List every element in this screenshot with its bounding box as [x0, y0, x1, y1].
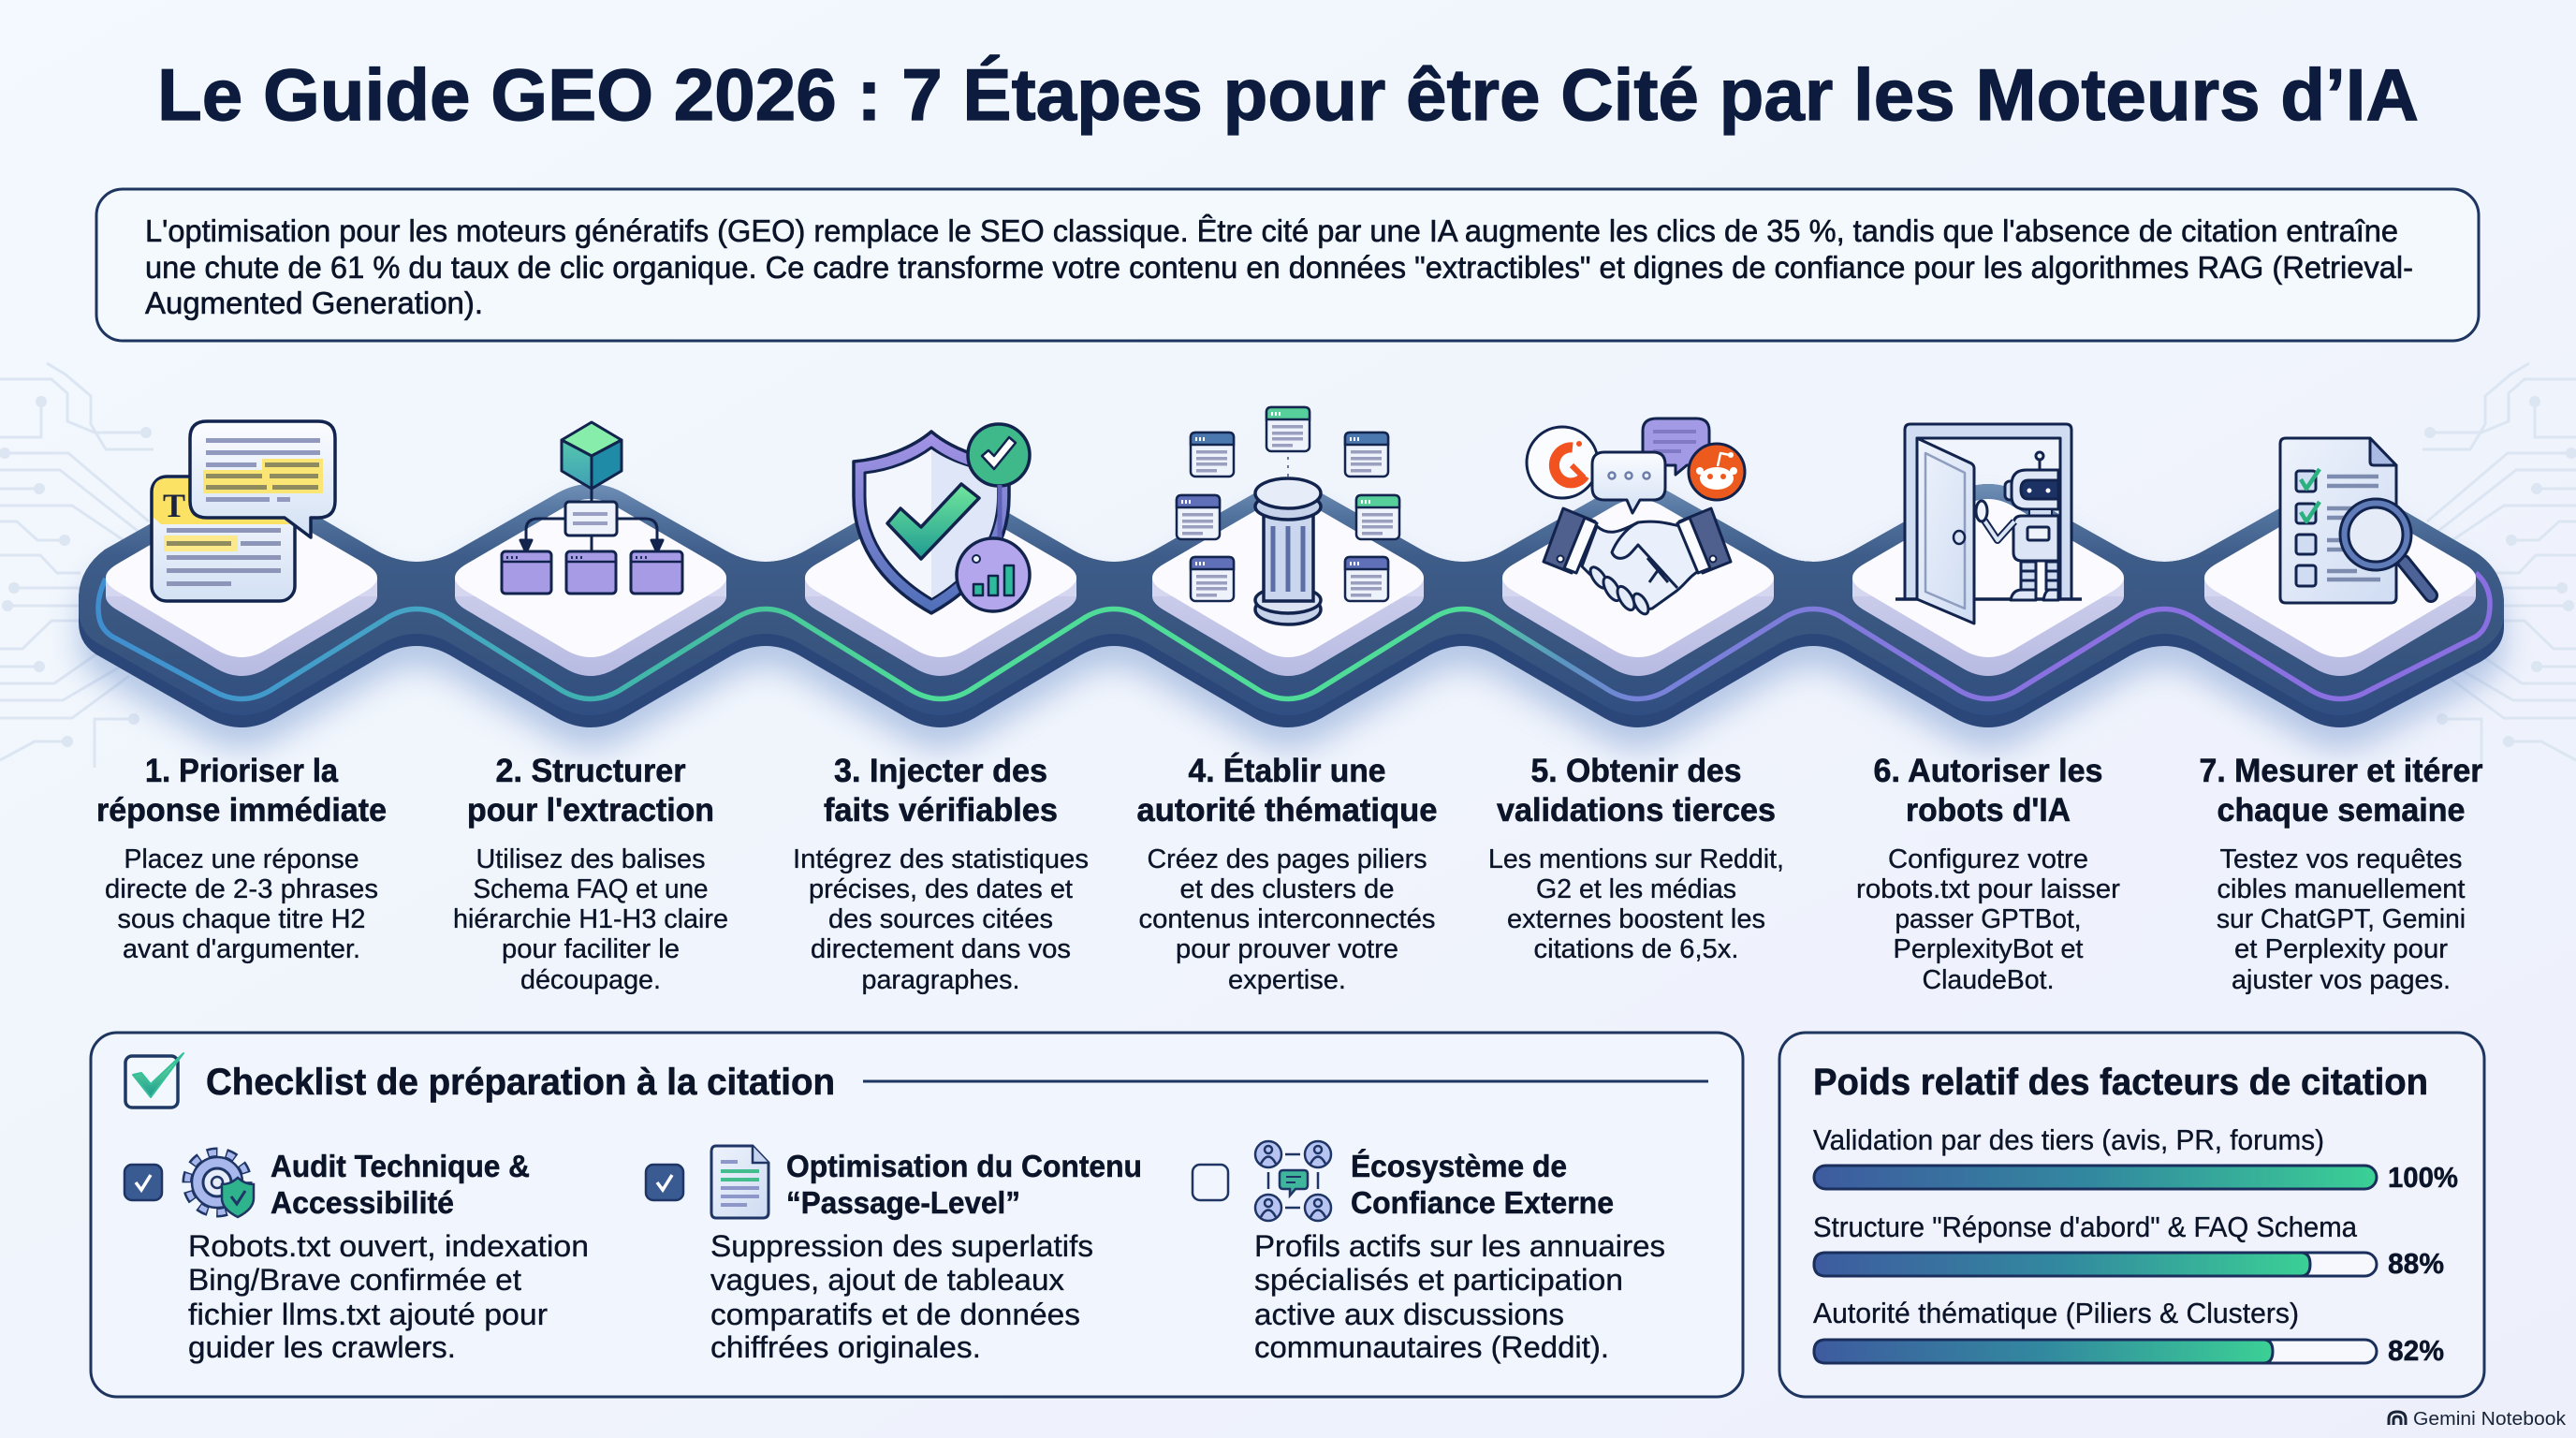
item: technical audit: fichier llms.txt ajouté pour — [188, 1298, 548, 1331]
step 4 text: Créez des pages piliers — [1148, 844, 1427, 874]
icon: pillar and cluster pages — [1177, 407, 1399, 624]
step 3 text: Intégrez des statistiques — [793, 844, 1089, 874]
step 4 text: autorité thématique — [1136, 792, 1438, 829]
step 6 text: robots.txt pour laisser — [1856, 874, 2120, 904]
bar: answer-first structure — [1813, 1211, 2444, 1280]
step 1 text: Placez une réponse — [124, 844, 359, 874]
step 1 text: directe de 2-3 phrases — [105, 874, 378, 904]
item: technical audit: Accessibilité — [271, 1185, 454, 1220]
step 3 text: des sources citées — [828, 904, 1053, 934]
logo: G2 — [1527, 427, 1598, 498]
step 5 text: citations de 6,5x. — [1533, 934, 1739, 964]
bar: third-party validation: Validation par des tiers (avis, PR, forums) — [1813, 1123, 2324, 1156]
item: content optimisation: comparatifs et de données — [710, 1298, 1080, 1331]
icon: checklist and magnifier — [2280, 438, 2431, 603]
step 3 text: directement dans vos — [811, 934, 1071, 964]
icon: hierarchy cube — [502, 422, 682, 594]
step 5 text — [1488, 753, 1784, 964]
step 6 text: ClaudeBot. — [1923, 965, 2054, 995]
step 4 text: 4. Établir une — [1189, 752, 1385, 789]
step 7 text: cibles manuellement — [2217, 874, 2466, 904]
step 3 text: 3. Injecter des — [834, 753, 1047, 789]
step 7 text: 7. Mesurer et itérer — [2200, 753, 2483, 789]
step 7 text: et Perplexity pour — [2234, 934, 2448, 964]
step 6 text: passer GPTBot, — [1895, 904, 2082, 934]
step 2 text: pour faciliter le — [502, 934, 680, 964]
step 2 text: pour l'extraction — [467, 792, 714, 829]
icon: verified shield — [854, 424, 1030, 613]
step 6 text — [1856, 753, 2120, 995]
step 1 text: avant d'argumenter. — [123, 934, 360, 964]
step 2 text: hiérarchie H1-H3 claire — [453, 904, 728, 934]
item: content optimisation: “Passage-Level” — [786, 1185, 1020, 1220]
step 2 text: Utilisez des balises — [476, 844, 706, 874]
step 6 text: 6. Autoriser les — [1874, 753, 2102, 789]
item: content optimisation: vagues, ajout de tableaux — [710, 1263, 1064, 1297]
item: technical audit — [124, 1149, 589, 1364]
step 5 text: G2 et les médias — [1536, 874, 1736, 904]
icon: document — [711, 1146, 768, 1218]
step 7 text: ajuster vos pages. — [2232, 965, 2451, 995]
bar: third-party validation — [1813, 1123, 2458, 1194]
step 5 text: Les mentions sur Reddit, — [1488, 844, 1784, 874]
process band — [79, 470, 2504, 750]
item: technical audit: Audit Technique & — [271, 1149, 530, 1183]
step 7 text: chaque semaine — [2217, 792, 2466, 829]
step 2 text: découpage. — [520, 965, 661, 995]
heading: factors: Poids relatif des facteurs de citation — [1813, 1062, 2428, 1103]
watermark: Gemini Notebook: Gemini Notebook — [2413, 1409, 2567, 1430]
step 7 text: Testez vos requêtes — [2220, 844, 2462, 874]
step 1 text: 1. Prioriser la — [145, 753, 338, 789]
bar: topical authority: Autorité thématique (Piliers & Clusters) — [1813, 1297, 2299, 1329]
item: technical audit: guider les crawlers. — [188, 1330, 456, 1364]
title: Le Guide GEO 2026 : 7 Étapes pour être Cité par les Moteurs d’IA — [157, 53, 2419, 136]
item: content optimisation: Suppression des superlatifs — [710, 1229, 1093, 1263]
item: trust ecosystem: Confiance Externe — [1351, 1185, 1614, 1220]
step 4 text: et des clusters de — [1179, 874, 1395, 904]
step 2 text: Schema FAQ et une — [474, 874, 708, 904]
item: trust ecosystem: communautaires (Reddit). — [1254, 1330, 1609, 1364]
panel: introduction: une chute de 61 % du taux de clic organique. Ce cadre transforme votre contenu en données "extractibles" et dignes de confiance pour les algorithmes RAG (Retrieval- — [145, 250, 2413, 285]
step 5 text: 5. Obtenir des — [1531, 753, 1741, 789]
item: trust ecosystem: Écosystème de — [1351, 1149, 1567, 1183]
item: trust ecosystem: active aux discussions — [1254, 1298, 1564, 1331]
panel: introduction: L'optimisation pour les moteurs génératifs (GEO) remplace le SEO classique. Être cité par une IA augmente les clics de 35 %, tandis que l'absence de citation entraîne — [145, 213, 2398, 248]
step 5 text: validations tierces — [1497, 792, 1776, 829]
step 1 text: réponse immédiate — [96, 792, 387, 829]
icon: answer documents: T — [163, 487, 185, 524]
step 2 text: 2. Structurer — [496, 753, 686, 789]
item: content optimisation — [646, 1146, 1142, 1364]
item: content optimisation: Optimisation du Contenu — [786, 1149, 1142, 1183]
icon: community network — [1255, 1141, 1331, 1221]
step 3 text: faits vérifiables — [824, 792, 1058, 829]
panel: introduction — [96, 189, 2479, 341]
step 3 text: précises, des dates et — [809, 874, 1073, 904]
panel: citation factors chart — [1779, 1033, 2484, 1397]
step 3 text — [793, 753, 1089, 995]
bar: answer-first structure: Structure "Réponse d'abord" & FAQ Schema — [1813, 1211, 2358, 1243]
item: technical audit: Bing/Brave confirmée et — [188, 1263, 521, 1297]
item: trust ecosystem — [1193, 1141, 1665, 1364]
icon: answer documents — [152, 421, 335, 601]
bar: topical authority: 82% — [2388, 1334, 2444, 1367]
step 6 text: PerplexityBot et — [1893, 934, 2084, 964]
step 7 text: sur ChatGPT, Gemini — [2217, 904, 2466, 934]
bar: third-party validation: 100% — [2388, 1161, 2458, 1194]
icon: handshake and review platforms — [1527, 418, 1745, 616]
icon: checklist header check — [125, 1053, 183, 1108]
bar: answer-first structure: 88% — [2388, 1247, 2444, 1280]
item: trust ecosystem: spécialisés et participation — [1254, 1263, 1623, 1297]
panel: introduction: Augmented Generation). — [145, 286, 483, 320]
item: technical audit: Robots.txt ouvert, indexation — [188, 1229, 589, 1263]
step 2 text — [453, 753, 728, 995]
step 3 text: paragraphes. — [861, 965, 1020, 995]
step 4 text: expertise. — [1228, 965, 1346, 995]
item: content optimisation: chiffrées originales. — [710, 1330, 981, 1364]
step 4 text: pour prouver votre — [1176, 934, 1398, 964]
step 7 text — [2200, 753, 2483, 995]
step 1 text: sous chaque titre H2 — [118, 904, 365, 934]
step 4 text — [1136, 752, 1438, 995]
step 6 text: Configurez votre — [1888, 844, 2088, 874]
logo: Reddit — [1689, 444, 1745, 500]
step 1 text — [96, 753, 387, 964]
icon: gear shield — [187, 1152, 254, 1217]
step 6 text: robots d'IA — [1906, 792, 2071, 829]
item: trust ecosystem: Profils actifs sur les annuaires — [1254, 1229, 1665, 1263]
step 5 text: externes boostent les — [1507, 904, 1765, 934]
step 4 text: contenus interconnectés — [1138, 904, 1436, 934]
heading: checklist: Checklist de préparation à la citation — [206, 1062, 835, 1103]
panel: checklist — [91, 1033, 1743, 1397]
icon: open door and robot — [1895, 424, 2082, 624]
bar: topical authority — [1813, 1297, 2444, 1367]
